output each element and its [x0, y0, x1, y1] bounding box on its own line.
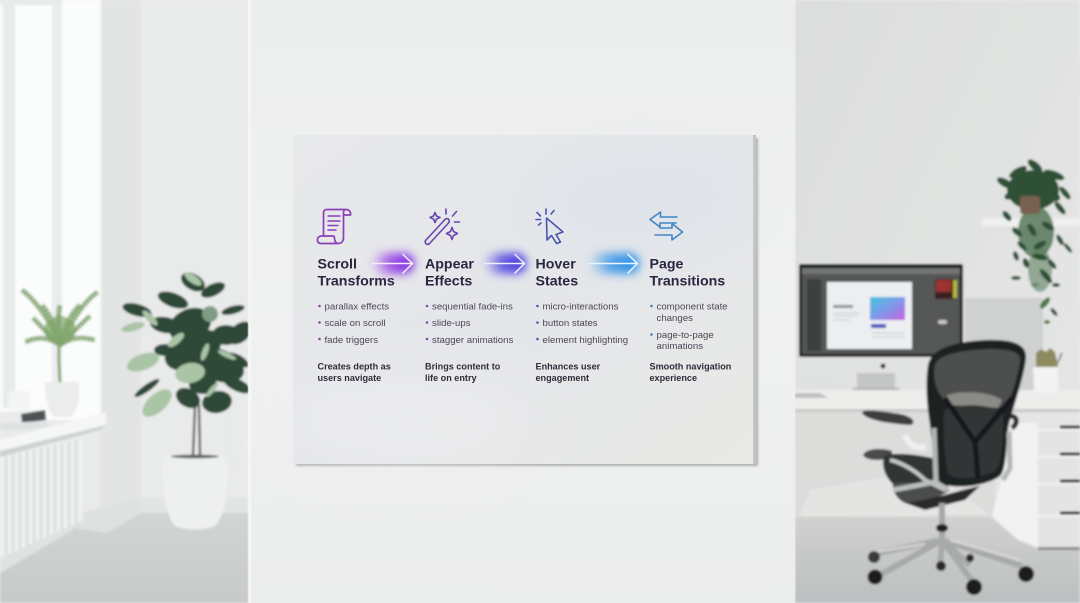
- feature bullets: component state: [656, 302, 728, 312]
- step 4: page transitions: [650, 212, 731, 383]
- step 1: scroll transforms: [317, 210, 395, 383]
- feature bullets: stagger animations: [432, 335, 514, 346]
- heading: Hover: [536, 256, 576, 272]
- radiator: [0, 438, 83, 573]
- feature bullets: sequential fade-ins: [432, 302, 513, 312]
- fern in pot: [22, 290, 98, 417]
- seat: [883, 454, 990, 490]
- right room scene: [795, 0, 1080, 603]
- benefit note: experience: [650, 373, 697, 383]
- benefit note: life on entry: [425, 373, 477, 383]
- step 3: hover states: [536, 209, 628, 383]
- benefit note: Creates depth as: [318, 362, 391, 372]
- feature bullets: fade triggers: [324, 335, 378, 346]
- frame: [934, 428, 1010, 482]
- step 2: appear effects: [425, 209, 514, 383]
- step 2: appear effects: Effects: [425, 274, 472, 290]
- feature bullets: element highlighting: [542, 335, 628, 346]
- heading: Appear: [425, 256, 474, 272]
- shelf: [982, 218, 1080, 226]
- step 4: page transitions: Transitions: [650, 274, 725, 290]
- books and cup: [0, 391, 47, 430]
- feature bullets: parallax effects: [324, 302, 389, 312]
- backrest: [927, 340, 1026, 487]
- step 1: scroll transforms: Transforms: [318, 274, 395, 290]
- icon: cursor: [536, 209, 563, 244]
- benefit note: Smooth navigation: [650, 362, 731, 372]
- feature bullets: scale on scroll: [324, 318, 385, 329]
- feature bullets: page-to-page: [656, 330, 714, 341]
- benefit note: [318, 362, 391, 383]
- feature bullets: [426, 302, 514, 346]
- feature bullets: animations: [656, 341, 703, 352]
- hanging plant: [995, 157, 1073, 324]
- fiddle leaf plant: [120, 269, 257, 530]
- feature bullets: [536, 302, 628, 346]
- floor: [0, 513, 250, 603]
- base: [905, 486, 980, 510]
- window sill: [0, 412, 106, 451]
- benefit note: [650, 362, 731, 383]
- drawer cabinet: [992, 423, 1080, 550]
- benefit note: [536, 362, 601, 383]
- centre wall: [250, 0, 795, 603]
- feature bullets: slide-ups: [432, 318, 471, 329]
- presentation board: [280, 135, 758, 466]
- benefit note: Brings content to: [425, 362, 501, 372]
- arrow: purple: [372, 253, 414, 274]
- grey wall panel: [965, 298, 1043, 390]
- feature bullets: [318, 302, 389, 346]
- feature bullets: button states: [542, 318, 598, 329]
- step 3: hover states: States: [536, 274, 578, 290]
- icon: swap arrows: [650, 212, 682, 240]
- benefit note: Enhances user: [536, 362, 601, 372]
- floor: [795, 517, 1080, 603]
- benefit note: [425, 362, 501, 383]
- feature bullets: changes: [656, 313, 693, 324]
- office chair: [862, 340, 1034, 595]
- benefit note: engagement: [536, 373, 589, 383]
- window: [0, 0, 101, 420]
- monitor: [799, 264, 963, 391]
- desk: [795, 390, 1080, 410]
- armrests: [862, 410, 913, 425]
- arrow: blue: [588, 253, 639, 274]
- arrow: indigo: [484, 253, 526, 274]
- small cactus pot: [1033, 348, 1062, 393]
- icon: magic wand: [425, 209, 460, 244]
- heading: Scroll: [318, 256, 357, 272]
- feature bullets: micro-interactions: [542, 302, 619, 312]
- back wall baseboard: [141, 498, 250, 514]
- heading: Page: [650, 256, 684, 272]
- left room scene: [0, 0, 257, 603]
- icon: scroll: [317, 210, 351, 244]
- benefit note: users navigate: [318, 373, 381, 383]
- feature bullets: [650, 302, 728, 352]
